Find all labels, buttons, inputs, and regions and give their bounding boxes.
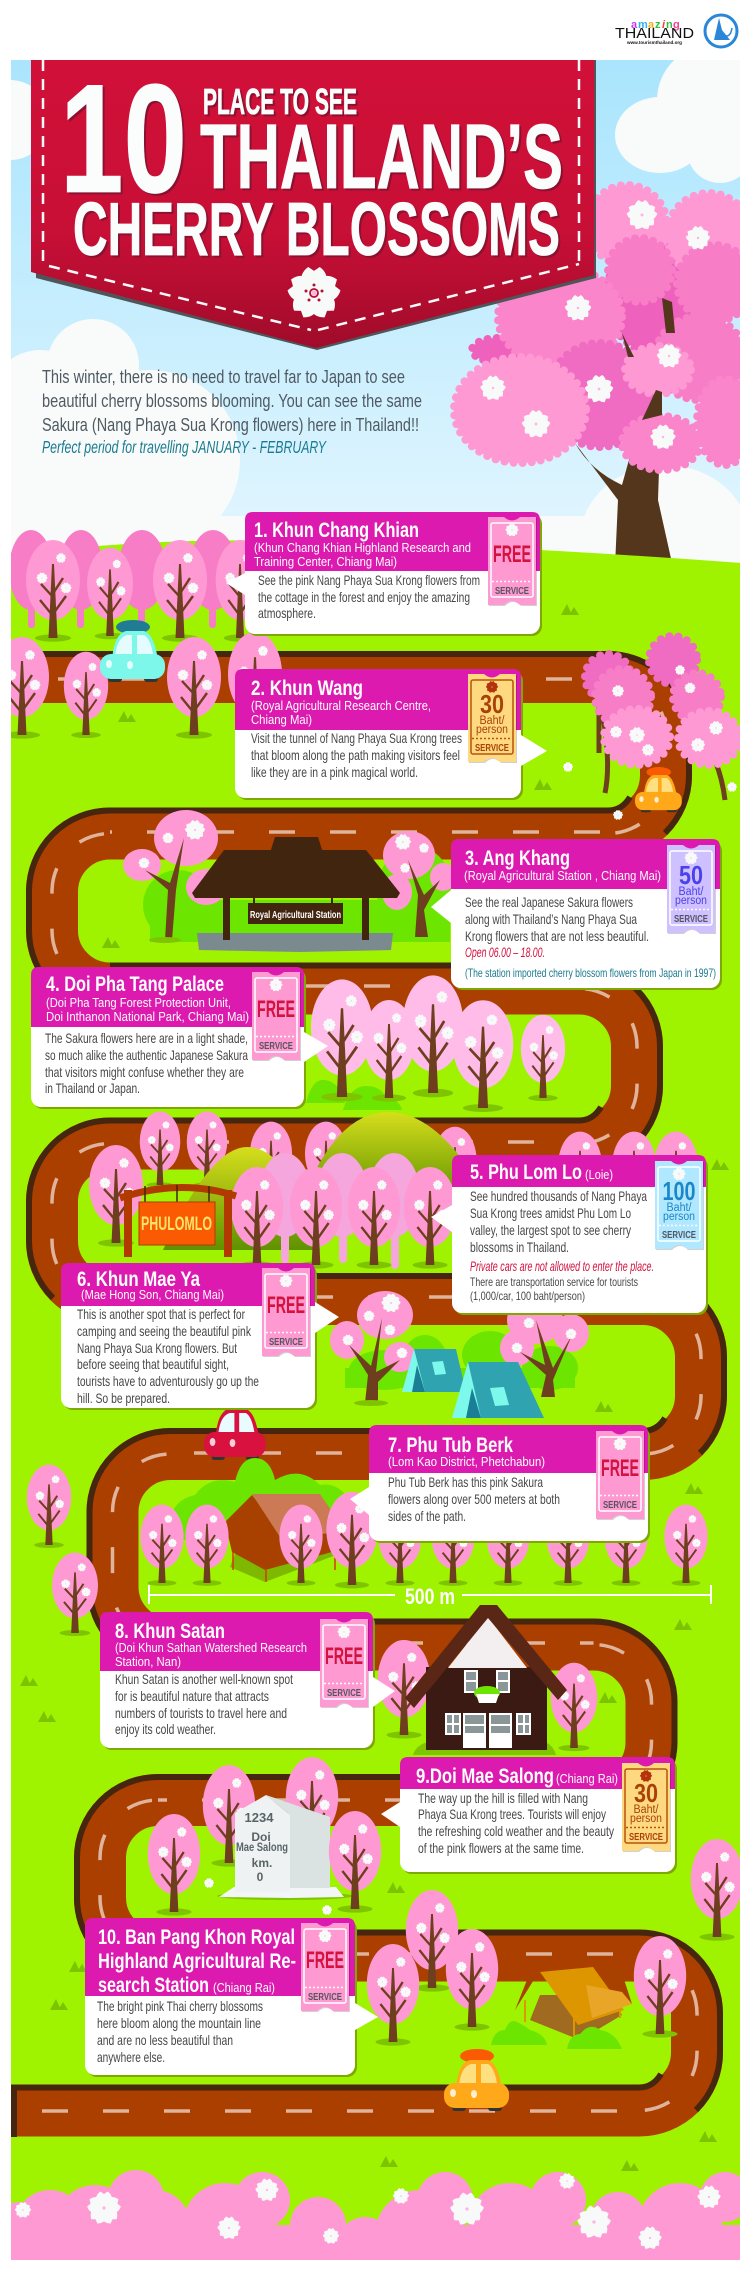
ticket: free: SERVICE xyxy=(269,1336,303,1348)
description: and are no less beautiful than xyxy=(97,2033,233,2048)
heading: 8. Khun Satan xyxy=(115,1620,225,1643)
ticket: 50 baht: person xyxy=(675,895,707,907)
ticket: 50 baht: SERVICE xyxy=(674,913,708,925)
description: Open 06.00 – 18.00. xyxy=(465,945,545,960)
description: See hundred thousands of Nang Phaya xyxy=(470,1189,647,1204)
car: orange xyxy=(444,2049,509,2111)
car: red xyxy=(204,1410,266,1460)
intro text: This winter, there is no need to travel far to Japan to see xyxy=(42,366,405,387)
heading xyxy=(46,973,249,1024)
heading: (Doi Khun Sathan Watershed Research xyxy=(115,1640,307,1655)
sign: Royal Agricultural Station: Royal Agricultural Station xyxy=(250,909,341,921)
description: the refreshing cold weather and the beauty xyxy=(418,1824,614,1839)
ticket: free xyxy=(596,1431,645,1520)
description: that bloom along the path making visitors feel xyxy=(251,748,460,763)
ticket: 30 baht: Baht/ xyxy=(634,1804,659,1816)
logo: Amazing Thailand: THAILAND xyxy=(615,25,694,42)
logo: Amazing Thailand: a xyxy=(631,19,638,31)
scene 5: Phu Lom Lo valley xyxy=(89,1112,698,1269)
green ground xyxy=(11,540,741,2260)
description: blossoms in Thailand. xyxy=(470,1240,569,1255)
icon: cherry blossom xyxy=(288,267,340,318)
description: enjoy its cold weather. xyxy=(115,1722,216,1737)
logo: Amazing Thailand: i xyxy=(662,19,666,31)
heading: Station, Nan) xyxy=(115,1654,181,1669)
description xyxy=(465,895,716,980)
ticket: 100 baht: person xyxy=(663,1211,695,1223)
description: This is another spot that is perfect for xyxy=(77,1307,245,1322)
heading: 9.Doi Mae Salong xyxy=(416,1765,554,1788)
description: See the real Japanese Sakura flowers xyxy=(465,895,633,910)
callout 10: Ban Pang Khon xyxy=(85,1918,378,2077)
title text: 10 xyxy=(60,52,187,225)
ticket: 30 baht xyxy=(622,1763,671,1852)
ticket: 100 baht: SERVICE xyxy=(662,1229,696,1241)
description: so much alike the authentic Japanese Sakura xyxy=(45,1048,248,1063)
road centre dashes xyxy=(11,677,701,2111)
milestone text xyxy=(236,1810,288,1884)
description: for is beautiful nature that attracts xyxy=(115,1689,269,1704)
description xyxy=(418,1791,614,1856)
logo: Amazing Thailand: www.tourismthailand.org xyxy=(626,40,682,45)
heading xyxy=(115,1620,307,1669)
ticket: 30 baht: person xyxy=(630,1813,662,1825)
logo: Amazing Thailand: m xyxy=(638,19,648,31)
heading: (Chiang Rai) xyxy=(556,1771,618,1786)
heading: 10. Ban Pang Khon Royal xyxy=(98,1926,295,1949)
description: here bloom along the mountain line xyxy=(97,2016,261,2031)
heading: (Royal Agricultural Station , Chiang Mai) xyxy=(464,868,661,883)
logo: Amazing Thailand: g xyxy=(673,19,680,31)
callout 7: Phu Tub Berk xyxy=(350,1425,650,1543)
car: yellow xyxy=(635,767,682,812)
heading: 7. Phu Tub Berk xyxy=(388,1434,513,1457)
500 m distance marker xyxy=(148,1585,712,1604)
ticket: free xyxy=(488,517,537,606)
logo: Tourism Authority seal xyxy=(705,15,737,47)
description xyxy=(251,731,462,780)
ticket: free: SERVICE xyxy=(327,1687,361,1699)
ticket: 30 baht: 30 xyxy=(480,689,504,719)
clouds xyxy=(11,60,740,563)
scene 1: Khun Chang Khian trees xyxy=(0,530,282,739)
description xyxy=(258,573,480,621)
callout 9: Doi Mae Salong xyxy=(381,1757,677,1874)
large cherry tree xyxy=(450,181,740,558)
ticket: 30 baht: Baht/ xyxy=(480,715,505,727)
title banner xyxy=(31,52,596,350)
grass tufts xyxy=(20,604,729,2171)
scene 4: light pink trees xyxy=(306,975,565,1112)
pink blossom hedge xyxy=(11,2170,740,2260)
intro text: Sakura (Nang Phaya Sua Krong flowers) here in Thailand!! xyxy=(42,414,419,435)
heading xyxy=(77,1268,224,1302)
ticket: 30 baht: SERVICE xyxy=(475,742,509,754)
description: Phu Tub Berk has this pink Sakura xyxy=(388,1475,543,1490)
ticket: 100 baht: 100 xyxy=(662,1176,696,1206)
description: The way up the hill is filled with Nang xyxy=(418,1791,588,1806)
ticket: free xyxy=(301,1923,350,2012)
callout 6: Khun Mae Ya xyxy=(61,1263,339,1410)
ticket: 30 baht: person xyxy=(476,724,508,736)
heading: Doi Inthanon National Park, Chiang Mai) xyxy=(46,1009,249,1024)
heading xyxy=(464,847,661,883)
description: flowers along over 500 meters at both xyxy=(388,1492,560,1507)
heading: (Mae Hong Son, Chiang Mai) xyxy=(81,1287,224,1302)
milestone text: Doi xyxy=(251,1830,271,1844)
heading: (Royal Agricultural Research Centre, xyxy=(251,698,431,713)
description: The bright pink Thai cherry blossoms xyxy=(97,1999,263,2014)
description xyxy=(388,1475,560,1524)
heading: 4. Doi Pha Tang Palace xyxy=(46,973,224,996)
heading: Training Center, Chiang Mai) xyxy=(254,554,397,569)
description: The Sakura flowers here are in a light shade, xyxy=(45,1031,248,1046)
heading: Highland Agricultural Re- xyxy=(98,1950,296,1973)
ticket: free: SERVICE xyxy=(259,1040,293,1052)
ticket: free xyxy=(262,1268,311,1357)
scene 8: chalet and trees xyxy=(378,1605,597,1755)
heading: 3. Ang Khang xyxy=(465,847,570,870)
description: There are transportation service for tourists xyxy=(470,1275,638,1289)
heading: (Doi Pha Tang Forest Protection Unit, xyxy=(46,995,231,1010)
description: Nang Phaya Sua Krong flowers. But xyxy=(77,1341,237,1356)
description: along with Thailand’s Nang Phaya Sua xyxy=(465,912,637,927)
description: (1,000/car, 100 baht/person) xyxy=(470,1289,585,1303)
heading: 5. Phu Lom Lo xyxy=(470,1161,582,1184)
description: before seeing that beautiful sight, xyxy=(77,1357,229,1372)
heading xyxy=(98,1926,296,1997)
logo: Amazing Thailand xyxy=(615,19,694,45)
ticket: free xyxy=(252,972,301,1061)
milestone text: Mae Salong xyxy=(236,1840,288,1854)
ticket: free: SERVICE xyxy=(603,1499,637,1511)
description: the cottage in the forest and enjoy the amazing xyxy=(258,590,470,605)
scene 6: camping site xyxy=(330,1291,589,1418)
title text: PLACE TO SEE xyxy=(203,81,357,122)
description xyxy=(97,1999,263,2065)
ticket: free xyxy=(320,1619,369,1708)
description: that visitors might confuse whether they are xyxy=(45,1065,244,1080)
description: tourists have to adventurously go up the xyxy=(77,1374,259,1389)
scene 3: Royal Agricultural Station xyxy=(123,810,456,952)
milestone text: 1234 xyxy=(245,1810,274,1825)
heading: (Loie) xyxy=(585,1167,613,1182)
description: in Thailand or Japan. xyxy=(45,1081,140,1096)
heading xyxy=(254,519,471,569)
callout 8: Khun Satan xyxy=(100,1612,395,1750)
heading xyxy=(251,677,431,727)
callout 4: Doi Pha Tang Palace xyxy=(31,967,328,1109)
description: Sua Krong trees amidst Phu Lom Lo xyxy=(470,1206,631,1221)
description: Khun Satan is another well-known spot xyxy=(115,1672,293,1687)
sign: Royal Agricultural Station xyxy=(248,903,343,924)
description: anywhere else. xyxy=(97,2050,165,2065)
intro text: beautiful cherry blossoms blooming. You can see the same xyxy=(42,390,422,411)
chalet windows xyxy=(445,1670,531,1748)
description: See the pink Nang Phaya Sua Krong flowers from xyxy=(258,573,480,588)
logo: Amazing Thailand: a xyxy=(648,19,655,31)
ticket: 100 baht xyxy=(655,1161,704,1250)
callout 1: Khun Chang Khian xyxy=(226,512,542,636)
ticket: free: SERVICE xyxy=(495,585,529,597)
intro text xyxy=(42,366,422,457)
heading: 1. Khun Chang Khian xyxy=(254,519,419,542)
title text: THAILAND’S xyxy=(200,106,563,208)
tents xyxy=(402,1349,544,1418)
description: of the pink flowers at the same time. xyxy=(418,1841,584,1856)
500 m distance marker: 500 m xyxy=(405,1584,455,1609)
description: valley, the largest spot to see cherry xyxy=(470,1223,631,1238)
scene 7: Phu Tub Berk cottage and trees xyxy=(27,1458,708,1636)
milestone text: km. xyxy=(252,1856,272,1870)
ticket: free: FREE xyxy=(257,996,295,1023)
logo: Amazing Thailand: n xyxy=(666,19,673,31)
description: hill. So be prepared. xyxy=(77,1391,170,1406)
ticket: 50 baht xyxy=(667,845,716,934)
description: sides of the path. xyxy=(388,1509,466,1524)
heading: (Lom Kao District, Phetchabun) xyxy=(388,1454,545,1469)
scene 9: Doi Mae Salong milestone xyxy=(148,1757,741,1941)
description: numbers of tourists to travel here and xyxy=(115,1706,287,1721)
sky background xyxy=(11,60,740,516)
ticket: 30 baht: SERVICE xyxy=(629,1831,663,1843)
heading: (Chiang Rai) xyxy=(213,1980,275,1995)
ticket: free: FREE xyxy=(493,541,531,568)
scene 10: Ban Pang Khon hut and trees xyxy=(367,1890,686,2049)
heading: search Station xyxy=(98,1974,209,1997)
ticket: free: SERVICE xyxy=(308,1991,342,2003)
description: Krong flowers that are not less beautiful. xyxy=(465,929,649,944)
car: teal xyxy=(100,620,165,682)
heading: 2. Khun Wang xyxy=(251,677,363,700)
winding road xyxy=(11,654,724,2137)
ticket: 30 baht: 30 xyxy=(634,1778,658,1808)
callout 3: Ang Khang xyxy=(431,839,722,990)
description: camping and seeing the beautiful pink xyxy=(77,1324,251,1339)
description xyxy=(45,1031,248,1096)
ticket: free: FREE xyxy=(306,1947,344,1974)
sign: PHULOMLO: PHULOMLO xyxy=(141,1214,212,1235)
scene 2: Khun Wang flowering trees xyxy=(562,636,740,820)
callout 2: Khun Wang xyxy=(235,669,547,800)
callout 5: Phu Lom Lo xyxy=(431,1155,708,1315)
ticket: 30 baht xyxy=(468,674,517,763)
logo: Amazing Thailand: z xyxy=(655,19,661,31)
description: atmosphere. xyxy=(258,606,316,621)
ticket: 100 baht: Baht/ xyxy=(666,1202,692,1214)
ticket: free: FREE xyxy=(325,1643,363,1670)
milestone text: 0 xyxy=(257,1870,264,1884)
ticket: 50 baht: 50 xyxy=(679,860,703,890)
heading: Chiang Mai) xyxy=(251,712,312,727)
ticket: 50 baht: Baht/ xyxy=(678,886,704,898)
ticket: free: FREE xyxy=(267,1292,305,1319)
heading xyxy=(388,1434,545,1469)
title text xyxy=(66,83,563,258)
heading: (Khun Chang Khian Highland Research and xyxy=(254,540,471,555)
description xyxy=(470,1189,654,1303)
ticket: free: FREE xyxy=(601,1455,639,1482)
description xyxy=(77,1307,259,1406)
description: Phaya Sua Krong trees. Tourists will enjoy xyxy=(418,1807,606,1822)
heading: 6. Khun Mae Ya xyxy=(77,1268,200,1291)
intro text: Perfect period for travelling JANUARY - FEBRUARY xyxy=(42,437,327,457)
sign: PHULOMLO xyxy=(120,1185,236,1257)
description: like they are in a pink magical world. xyxy=(251,765,418,780)
description: Visit the tunnel of Nang Phaya Sua Krong trees xyxy=(251,731,462,746)
description xyxy=(115,1672,293,1737)
